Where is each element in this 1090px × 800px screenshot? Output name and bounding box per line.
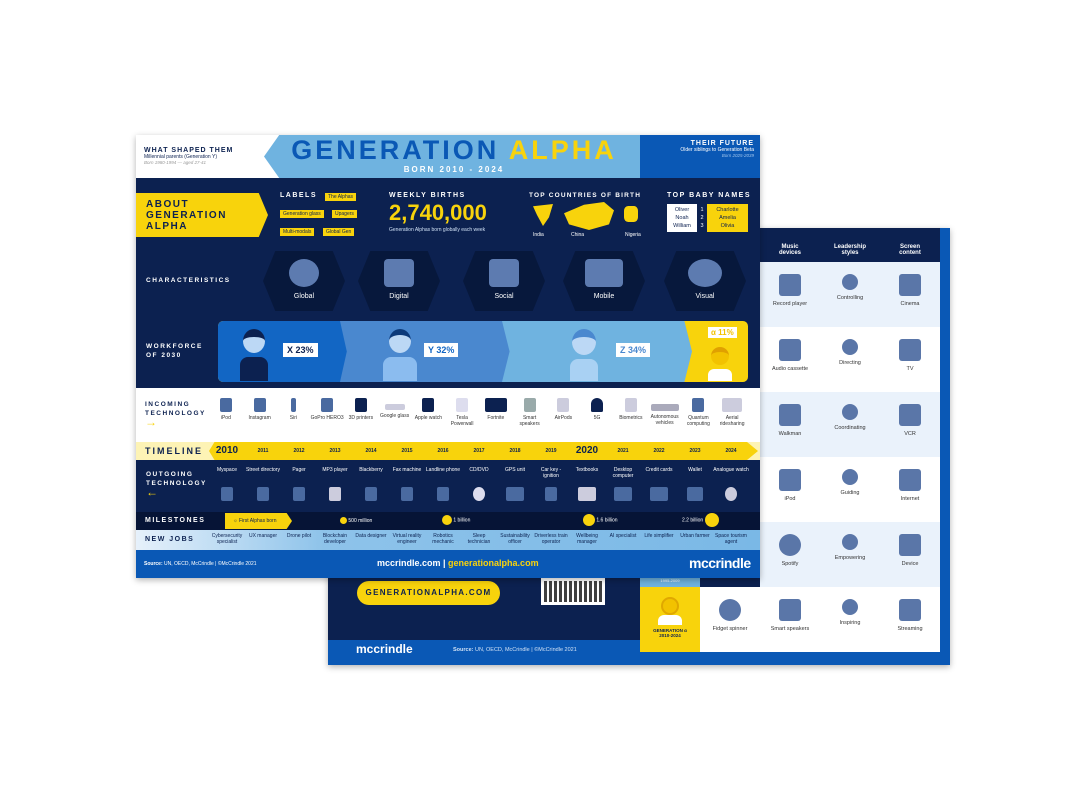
- timeline years: 2022: [653, 448, 665, 454]
- incoming icons: Google glass: [380, 413, 409, 419]
- gen alpha box: [640, 587, 700, 652]
- new jobs list: Urban farmer: [680, 533, 710, 539]
- weekly births: 2,740,000: [389, 200, 487, 225]
- header left: Millennial parents (Generation Y): [144, 154, 217, 160]
- outgoing icons: Car key - ignition: [541, 467, 561, 479]
- gen label small: 1995-2009: [660, 578, 680, 583]
- text: Device: [902, 561, 918, 567]
- hex: mobile: [563, 251, 645, 311]
- milestone first alphas: ☼ First Alphas born: [233, 518, 276, 524]
- top baby names: 3: [700, 223, 704, 229]
- text: Coordinating: [834, 425, 866, 431]
- workforce bar: Y 32%: [428, 345, 454, 355]
- incoming icons: 3D printers: [349, 415, 373, 421]
- text: Streaming: [897, 626, 923, 632]
- incoming icons: Smart speakers: [519, 415, 540, 427]
- person alpha: [708, 347, 732, 381]
- milestone 1.6b: 1.6 billion: [596, 517, 618, 523]
- text: TV: [906, 366, 914, 372]
- timeline band: [136, 442, 760, 460]
- new jobs list: Sleep technician: [468, 533, 490, 545]
- workforce heading: [146, 343, 203, 359]
- top baby names: Oliver: [675, 207, 689, 213]
- header left: [144, 147, 233, 165]
- milestone 1.6b: [583, 514, 618, 526]
- top baby names: Olivia: [721, 223, 734, 229]
- table rows: Cinema: [901, 301, 919, 307]
- text: Walkman: [779, 431, 801, 437]
- hex: digital: Digital: [389, 293, 409, 300]
- new jobs list: UX manager: [249, 533, 277, 539]
- source: Source: UN, OECD, McCrindle | ©McCrindle 2021: [144, 561, 257, 567]
- weekly births: [389, 192, 487, 233]
- hex: digital: [358, 251, 440, 311]
- labels block: LABELS: [280, 192, 317, 199]
- incoming icons: Biometrics: [619, 415, 643, 421]
- person Z: [570, 329, 598, 381]
- person X: [240, 329, 268, 381]
- subtitle: BORN 2010 - 2024: [404, 165, 504, 174]
- table header: [760, 237, 940, 262]
- timeline years: 2013: [329, 448, 341, 454]
- new jobs list: Drone pilot: [287, 533, 311, 539]
- header: [136, 135, 760, 178]
- incoming icons: Aerial ridesharing: [720, 415, 744, 427]
- hex: visual: [664, 251, 746, 311]
- timeline years: 2018: [509, 448, 521, 454]
- incoming icons: 5G: [594, 415, 600, 421]
- header right: [640, 135, 760, 178]
- incoming icons: Autonomous vehicles: [651, 414, 679, 426]
- timeline years: 2019: [545, 448, 557, 454]
- incoming heading: TECHNOLOGY: [145, 410, 206, 417]
- hex: social: Social: [494, 293, 514, 300]
- incoming heading: →: [145, 415, 158, 429]
- front sheet: [136, 135, 760, 578]
- outgoing heading: TECHNOLOGY: [146, 480, 207, 487]
- outgoing icons: Analogue watch: [713, 467, 749, 473]
- top baby names: TOP BABY NAMES: [667, 192, 751, 199]
- QR code: [541, 578, 605, 605]
- hex: mobile: Mobile: [594, 293, 614, 300]
- text: Audio cassette: [772, 366, 808, 372]
- labels block: Global Gen: [326, 229, 351, 235]
- back sheet: [328, 228, 950, 665]
- incoming heading: INCOMING: [145, 401, 190, 408]
- outgoing icons: Wallet: [688, 467, 702, 473]
- header band: [264, 135, 644, 178]
- weekly births: WEEKLY BIRTHS: [389, 192, 466, 199]
- timeline years: 2015: [401, 448, 413, 454]
- milestones band: [136, 512, 760, 530]
- milestone 2.2b: [682, 513, 719, 527]
- outgoing heading: ←: [146, 485, 160, 499]
- text: Directing: [839, 360, 861, 366]
- new jobs list: Virtual reality engineer: [393, 533, 421, 545]
- incoming icons: iPod: [221, 415, 231, 421]
- outgoing heading: OUTGOING: [146, 471, 193, 478]
- outgoing icons: Street directory: [246, 467, 280, 473]
- top baby names: [667, 192, 751, 232]
- about label: [136, 193, 268, 237]
- timeline years: 2016: [437, 448, 449, 454]
- incoming icons: GoPro HERO3: [311, 415, 344, 421]
- table header: styles: [841, 250, 858, 256]
- outgoing icons: Landline phone: [426, 467, 460, 473]
- incoming technology band: [136, 388, 760, 442]
- outgoing icons: MP3 player: [322, 467, 348, 473]
- top baby names: William: [673, 223, 691, 229]
- back source: Source: UN, OECD, McCrindle | ©McCrindle 2021: [453, 647, 577, 653]
- outgoing icons: CD/DVD: [469, 467, 489, 473]
- timeline heading: TIMELINE: [145, 446, 203, 456]
- front footer: [136, 550, 760, 578]
- milestone 500m: [340, 517, 372, 524]
- new jobs list: [212, 533, 747, 545]
- header right: THEIR FUTURE: [691, 140, 754, 147]
- urls: mccrindle.com | generationalpha.com: [377, 558, 539, 568]
- gen alpha box: 2010-2024: [659, 633, 681, 638]
- timeline years: 2023: [689, 448, 701, 454]
- new jobs list: Driverless train operator: [534, 533, 568, 545]
- outgoing icons: Fax machine: [393, 467, 421, 473]
- milestone 2.2b: 2.2 billion: [682, 517, 703, 523]
- incoming icons: Fortnite: [487, 415, 504, 421]
- incoming icons: AirPods: [555, 415, 572, 421]
- about label: GENERATION: [146, 210, 227, 221]
- labels block: Upagers: [335, 211, 354, 217]
- characteristics heading: CHARACTERISTICS: [146, 277, 231, 284]
- outgoing icons: Credit cards: [646, 467, 672, 473]
- new jobs list: Sustainability officer: [500, 533, 530, 545]
- table header: Screen: [900, 244, 920, 250]
- new jobs list: Robotics mechanic: [432, 533, 454, 545]
- outgoing icons: Pager: [292, 467, 306, 473]
- labels block: [280, 192, 357, 236]
- gen label small: [640, 578, 700, 587]
- text: VCR: [904, 431, 916, 437]
- hex: visual: Visual: [696, 293, 714, 300]
- workforce bar: X 23%: [287, 345, 314, 355]
- hex: global: Global: [294, 293, 314, 300]
- timeline years: 2017: [473, 448, 485, 454]
- text: Inspiring: [840, 620, 860, 626]
- hex: social: [463, 251, 545, 311]
- website pill: [357, 581, 500, 605]
- new jobs list: AI specialist: [610, 533, 636, 539]
- incoming icons: Apple watch: [415, 415, 442, 421]
- table header: Music: [781, 244, 798, 250]
- title: GENERATION ALPHA: [291, 135, 617, 165]
- header left: WHAT SHAPED THEM: [144, 147, 233, 154]
- back footer: [328, 640, 950, 665]
- incoming icons: [220, 398, 744, 427]
- text: iPod: [784, 496, 796, 502]
- timeline years: 2010: [216, 445, 238, 456]
- table rows: Record player: [773, 301, 807, 307]
- back logo: mccrindle: [356, 642, 413, 656]
- timeline years: [216, 445, 737, 456]
- outgoing heading: [146, 471, 207, 499]
- about label: ABOUT: [146, 199, 189, 210]
- workforce heading: WORKFORCE: [146, 343, 203, 350]
- text: Spotify: [782, 561, 798, 567]
- table header: content: [899, 250, 921, 256]
- website pill: GENERATIONALPHA.COM: [366, 588, 491, 597]
- outgoing icons: [217, 467, 749, 501]
- top baby names: Charlotte: [716, 207, 739, 213]
- logo: mccrindle: [689, 555, 751, 571]
- workforce heading: OF 2030: [146, 352, 182, 359]
- header right: Older siblings to Generation Beta: [680, 147, 754, 153]
- milestone 1b: [442, 515, 470, 525]
- top countries: Nigeria: [625, 232, 641, 238]
- new jobs list: Wellbeing manager: [576, 533, 598, 545]
- new jobs list: Data designer: [355, 533, 387, 539]
- timeline years: 2024: [725, 448, 737, 454]
- top countries: TOP COUNTRIES OF BIRTH: [529, 192, 641, 199]
- incoming icons: Siri: [290, 415, 297, 421]
- timeline years: 2011: [258, 448, 268, 454]
- outgoing icons: Desktop computer: [613, 467, 633, 479]
- incoming icons: Quantum computing: [687, 415, 710, 427]
- timeline years: 2021: [617, 448, 629, 454]
- text: Empowering: [835, 555, 865, 561]
- workforce bar: α 11%: [711, 328, 734, 337]
- gen alpha box: GENERATION α: [653, 628, 687, 633]
- top baby names: Amelia: [719, 215, 736, 221]
- text: Fidget spinner: [713, 626, 747, 632]
- top countries: [529, 192, 641, 238]
- labels block: Generation glass: [283, 211, 321, 217]
- top countries: India: [533, 232, 544, 238]
- top baby names: Noah: [675, 215, 689, 221]
- labels block: The Alphas: [328, 194, 353, 200]
- timeline years: 2020: [576, 445, 598, 456]
- top baby names: 2: [700, 215, 704, 221]
- person Y: [383, 329, 417, 381]
- new jobs list: Blockchain developer: [323, 533, 347, 545]
- header right: Born 2025-2039: [722, 153, 754, 158]
- top baby names: 1: [700, 207, 704, 213]
- table rows: [760, 262, 940, 327]
- milestone 1b: 1 billion: [453, 517, 470, 523]
- outgoing icons: GPS unit: [505, 467, 525, 473]
- outgoing icons: Textbooks: [576, 467, 598, 473]
- incoming icons: Instagram: [248, 415, 271, 421]
- new jobs list: Space tourism agent: [715, 533, 747, 545]
- milestones heading: MILESTONES: [145, 517, 205, 524]
- outgoing icons: Myspace: [217, 467, 237, 473]
- new jobs list: Cybersecurity specialist: [212, 533, 242, 545]
- table header: Leadership: [834, 244, 866, 250]
- new jobs list: Life simplifier: [644, 533, 674, 539]
- labels block: Multi-modals: [283, 229, 311, 235]
- timeline years: 2012: [293, 448, 305, 454]
- workforce bar: [218, 321, 748, 382]
- text: Guiding: [841, 490, 859, 496]
- new jobs band: [136, 530, 760, 550]
- top countries: China: [571, 232, 584, 238]
- weekly births: Generation Alphas born globally each week: [389, 227, 485, 233]
- table header: devices: [779, 250, 801, 256]
- new jobs heading: NEW JOBS: [145, 536, 194, 543]
- text: Smart speakers: [771, 626, 809, 632]
- workforce bar: Z 34%: [620, 345, 646, 355]
- about label: ALPHA: [146, 221, 188, 232]
- header left: Born 1980-1994 — aged 27-41: [144, 160, 206, 165]
- incoming icons: Tesla Powerwall: [451, 415, 474, 427]
- table rows: Controlling: [837, 295, 863, 301]
- milestone first alphas: [225, 513, 292, 529]
- back sheet right border: [940, 228, 950, 665]
- hex: global: [263, 251, 345, 311]
- timeline years: 2014: [365, 448, 377, 454]
- milestone 500m: 500 million: [348, 518, 372, 524]
- incoming heading: [145, 401, 206, 429]
- outgoing icons: Blackberry: [359, 467, 383, 473]
- text: Internet: [901, 496, 919, 502]
